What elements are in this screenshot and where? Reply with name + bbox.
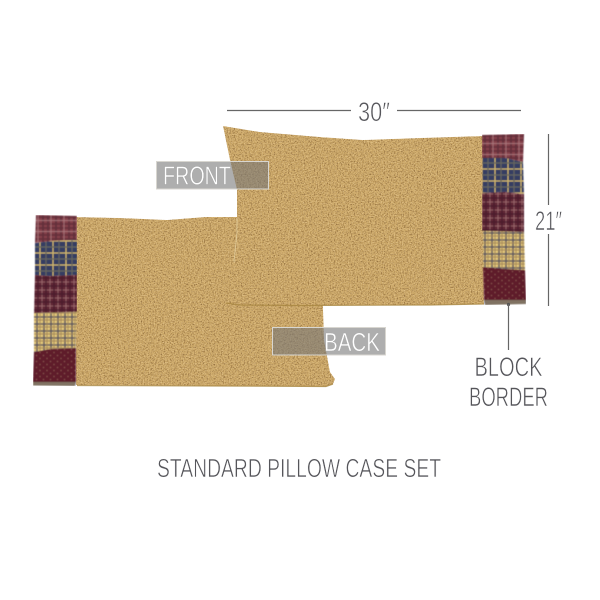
callout: block border: BLOCK — [474, 352, 542, 382]
caption: STANDARD PILLOW CASE SET — [157, 453, 441, 483]
dimension: 21 inch height: 21″ — [535, 206, 562, 236]
front pillow block border — [482, 134, 526, 305]
dimension: 30 inch width: 30″ — [358, 97, 390, 127]
callout: block border — [469, 303, 548, 412]
front pillow case — [223, 126, 526, 306]
back pillow lower edge shading — [77, 384, 333, 386]
front pillow body fabric — [223, 126, 484, 306]
front pillow lower edge shading — [226, 303, 484, 306]
back pillow block border — [33, 215, 77, 386]
back pillow body fabric — [76, 217, 335, 386]
label: FRONT: FRONT — [163, 160, 231, 190]
label: BACK: BACK — [324, 327, 381, 357]
callout: block border: BORDER — [469, 382, 548, 412]
back pillow case — [33, 215, 335, 386]
front pillow left seam highlight — [234, 218, 237, 262]
label: BACK — [272, 327, 386, 357]
